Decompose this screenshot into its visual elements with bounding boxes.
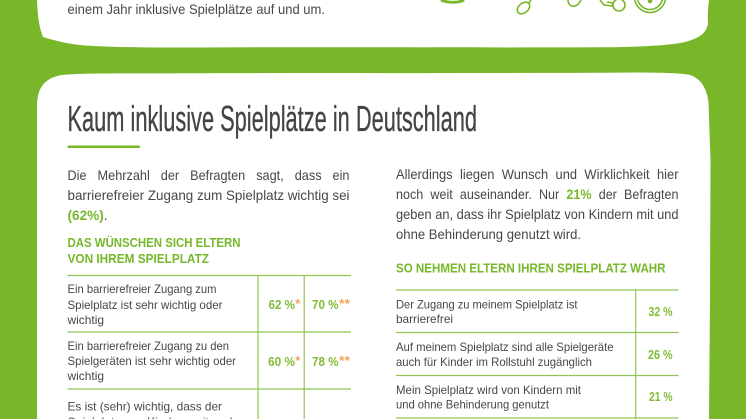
table: parents' perception (396, 290, 678, 419)
heading: Kaum inklusive Spielplätze in Deutschland (68, 98, 477, 139)
row 3: Mein Spielplatz wird von Kindern mit (396, 383, 582, 397)
left intro paragraph: barrierefreier Zugang zum Spielplatz wichtig sei (68, 188, 350, 203)
row 2: Auf meinem Spielplatz sind alle Spielgeräte (396, 340, 614, 354)
left table heading (68, 235, 240, 266)
row 2: auch für Kinder im Rollstuhl zugänglich (396, 355, 592, 369)
right intro paragraph (396, 167, 679, 242)
left intro paragraph: (62%). (68, 208, 108, 223)
row 2 (396, 340, 673, 369)
row 3: und ohne Behinderung genutzt (396, 398, 550, 412)
row 1: Der Zugang zu meinem Spielplatz ist (396, 298, 578, 312)
row 2: wichtig (67, 369, 104, 383)
row 1: 62 % (268, 297, 295, 312)
panel: top card (37, 0, 709, 48)
right intro paragraph: geben an, dass ihr Spielplatz von Kindern mit und (396, 207, 678, 222)
intro text: einem Jahr inklusive Spielplätze auf und um. (68, 2, 325, 17)
row 1 (396, 298, 673, 326)
row 1: barrierefrei (396, 312, 453, 326)
row 1: Spielplatz ist sehr wichtig oder (68, 298, 222, 312)
row 2: * (295, 353, 301, 368)
right intro paragraph: ohne Behinderung genutzt wird. (396, 227, 581, 242)
icon: playground illustration (441, 0, 666, 16)
right intro paragraph: Allerdings liegen Wunsch und Wirklichkeit hier (396, 167, 679, 182)
row 3: 21 % (649, 389, 673, 404)
left table heading: DAS WÜNSCHEN SICH ELTERN (68, 235, 240, 250)
row 1: 32 % (648, 304, 673, 319)
row 1 (67, 282, 351, 327)
row 1: ** (339, 296, 351, 311)
left intro paragraph: Die Mehrzahl der Befragten sagt, dass ein (68, 168, 350, 183)
row 2 (67, 339, 351, 383)
right intro paragraph: noch weit auseinander. Nur 21% der Befragten (396, 187, 678, 202)
row 2: 78 % (312, 354, 339, 369)
panel: main card (37, 72, 710, 419)
row 1: wichtig (67, 313, 104, 327)
table: wishes of parents (67, 276, 351, 419)
row 2: Ein barrierefreier Zugang zu den (68, 339, 229, 353)
row 1: 70 % (312, 297, 339, 312)
row 2: Spielgeräten ist sehr wichtig oder (68, 354, 236, 368)
row 1: Ein barrierefreier Zugang zum (68, 282, 217, 296)
heading underline (68, 146, 140, 148)
row 3 (68, 400, 232, 419)
right table heading: SO NEHMEN ELTERN IHREN SPIELPLATZ WAHR (396, 260, 666, 276)
row 3 (396, 383, 673, 412)
row 2: 60 % (268, 354, 295, 369)
row 1: * (295, 296, 301, 311)
left table heading: VON IHREM SPIELPLATZ (68, 251, 209, 266)
row 2: ** (339, 353, 351, 368)
left intro paragraph (68, 168, 350, 223)
row 3: Es ist (sehr) wichtig, dass der (68, 400, 222, 414)
row 2: 26 % (648, 347, 673, 362)
